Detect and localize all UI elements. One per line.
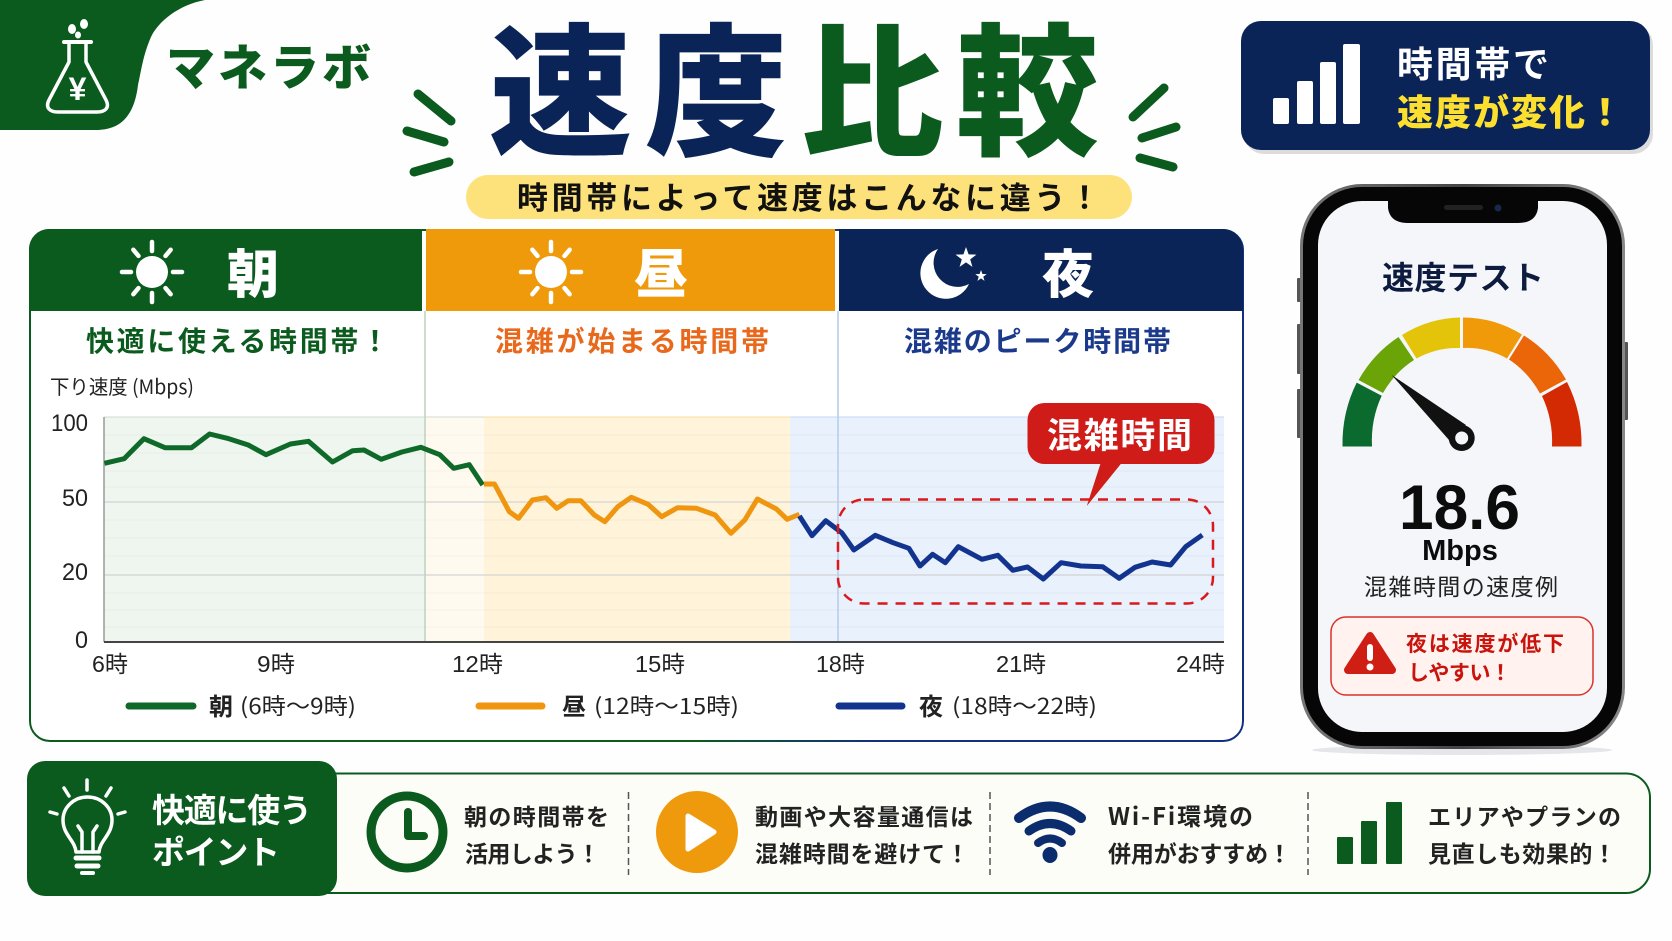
legend: noon [479, 687, 739, 722]
badge text line 1: 時間帯で [1397, 36, 1549, 88]
logo green corner shape [0, 0, 205, 130]
icon: left burst lines [407, 94, 451, 172]
x axis labels: 9時 [257, 651, 295, 677]
logo wordmark: マネラボ [166, 29, 371, 100]
axis title: 下り速度 (Mbps) [50, 371, 194, 400]
panel header: morning [29, 229, 422, 311]
night line series [799, 516, 1202, 579]
icon: light bulb [50, 780, 125, 873]
morning caption: 快適に使える時間帯！ [86, 320, 389, 360]
tip: plan review: 見直しも効果的！ [1428, 835, 1616, 869]
y axis labels: 100 [51, 410, 88, 437]
icon: green bars [1337, 802, 1402, 864]
x axis labels: 12時 [452, 651, 503, 677]
morning line series [104, 434, 483, 485]
x axis labels [92, 651, 1225, 677]
gauge needle [1392, 375, 1475, 451]
panel header: morning: 朝 [227, 233, 279, 308]
noon line series [484, 484, 799, 533]
noon caption: 混雑が始まる時間帯 [495, 320, 769, 360]
icon: sun [521, 242, 581, 302]
icon: flask with yen: ¥ [69, 71, 87, 107]
x axis labels: 21時 [996, 651, 1046, 677]
phone heading: 速度テスト [1382, 253, 1544, 299]
callout: 混雑時間: 混雑時間 [1047, 408, 1192, 459]
legend: morning: (6時～9時) [240, 689, 356, 721]
tip: wi-fi: 併用がおすすめ！ [1108, 835, 1291, 869]
badge text line 2: 速度が変化！ [1397, 84, 1623, 136]
tip: plan review: エリアやプランの [1428, 798, 1621, 832]
phone side buttons [1297, 278, 1628, 438]
icon: moon and stars [920, 247, 987, 299]
icon: signal bars [1273, 44, 1360, 124]
phone: speed test [1297, 184, 1628, 755]
tips bar background [300, 774, 1650, 893]
gauge [1342, 318, 1582, 451]
tip: wi-fi: Wi-Fi環境の [1108, 797, 1253, 832]
phone notch [1388, 199, 1538, 223]
icon: sun [122, 242, 182, 302]
panel header: noon: 昼 [634, 230, 688, 309]
chart background bands [104, 311, 1224, 642]
tip: avoid peak for video: 動画や大容量通信は [755, 798, 973, 832]
tip: morning use: 活用しよう！ [465, 835, 600, 869]
icon: right burst lines [1133, 88, 1176, 167]
y axis labels: 20 [62, 559, 88, 586]
icon: wifi [1019, 806, 1081, 863]
panel: speed chart [29, 229, 1243, 741]
badge: 時間帯で速度が変化 [1241, 21, 1653, 154]
legend: noon: (12時～15時) [594, 689, 739, 721]
panel header: noon [426, 229, 835, 311]
tip: morning use [371, 796, 609, 869]
icon: flask with yen [48, 19, 107, 112]
tips heading box: ポイント [152, 826, 280, 874]
y axis labels: 50 [62, 485, 88, 512]
subtitle pill: 時間帯によって速度はこんなに違う！ [517, 173, 1100, 218]
x axis labels: 24時 [1176, 651, 1225, 677]
chart legend [129, 687, 1097, 722]
line chart [50, 311, 1225, 677]
tip: avoid peak for video [656, 791, 973, 873]
tip: avoid peak for video: 混雑時間を避けて！ [755, 835, 969, 869]
legend: night: 夜 [919, 687, 943, 722]
x axis labels: 18時 [816, 651, 865, 677]
panel header: night: 夜 [1042, 233, 1094, 308]
legend: morning: 朝 [209, 687, 233, 722]
panel header: night [839, 229, 1243, 311]
speed value: 18.6 [1399, 473, 1520, 543]
alert box [1331, 617, 1593, 695]
phone body [1300, 184, 1625, 749]
tip: plan review [1337, 798, 1621, 869]
legend: noon: 昼 [562, 687, 586, 722]
speed note: 混雑時間の速度例 [1364, 568, 1558, 602]
alert box: しやすい！ [1408, 657, 1511, 687]
x axis labels: 15時 [635, 651, 685, 677]
speed unit: Mbps [1422, 535, 1498, 567]
congestion dashed highlight [838, 500, 1213, 604]
logo: マネラボ [0, 0, 371, 130]
y axis labels [51, 410, 88, 654]
y axis labels: 0 [75, 627, 88, 654]
callout: 混雑時間 [1028, 403, 1214, 506]
tip: morning use: 朝の時間帯を [464, 798, 609, 832]
icon: play button [656, 791, 738, 873]
legend: morning [129, 687, 356, 722]
icon: warning triangle [1348, 636, 1392, 670]
night caption: 混雑のピーク時間帯 [904, 320, 1171, 360]
x axis labels: 6時 [92, 651, 128, 677]
legend: night [839, 687, 1097, 722]
phone screen [1318, 201, 1607, 732]
legend: night: (18時～22時) [952, 689, 1097, 721]
alert box: 夜は速度が低下 [1406, 628, 1564, 658]
tips heading box: 快適に使う [152, 784, 312, 832]
tip: wi-fi [1019, 797, 1291, 869]
icon: clock [371, 796, 443, 868]
tips heading box [27, 761, 337, 896]
panel: usage tips [27, 761, 1650, 896]
